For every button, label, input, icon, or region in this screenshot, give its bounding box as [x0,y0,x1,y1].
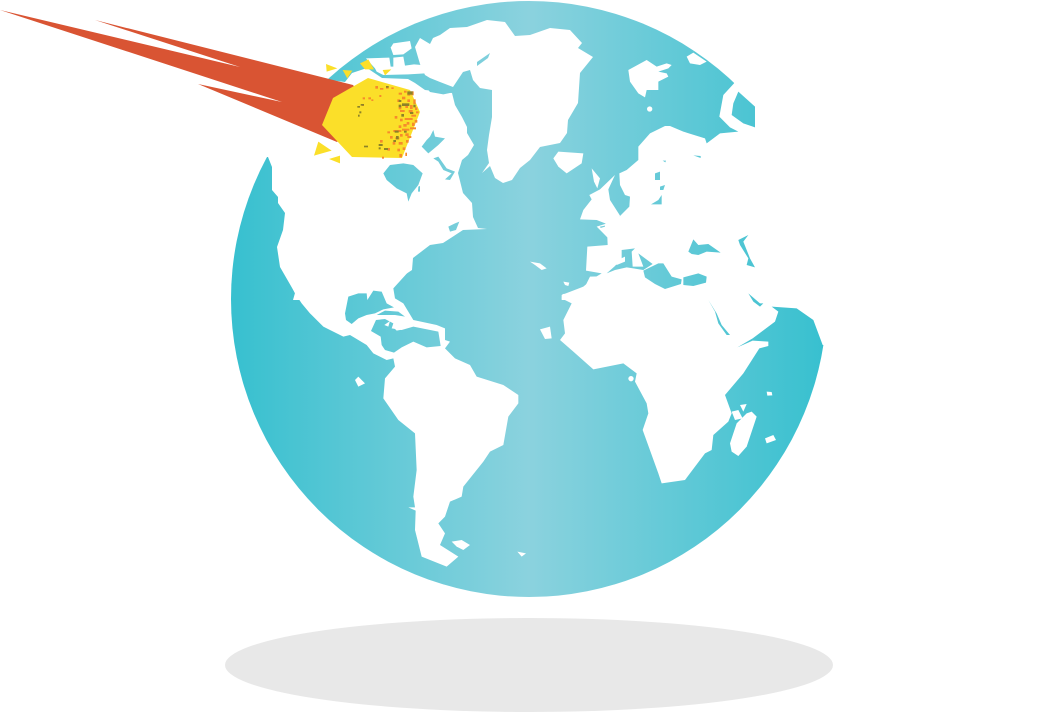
land: Falklands [452,540,470,550]
land: Iceland [553,152,583,173]
land: Jamaica [384,321,390,327]
land: Madagascar [730,412,757,456]
fireball speckles [357,86,419,159]
land: Reunion [765,435,776,443]
land: Arctic Canada [366,41,425,75]
land: Comoros [732,410,743,420]
land: Svalbard [628,60,672,97]
land: North America [267,68,486,300]
land: Cape Verde [540,327,552,339]
land: Franz Josef [687,53,707,65]
comet debris shards [314,59,391,163]
land: Azores [530,262,547,270]
ground shadow [225,618,833,712]
land: Sardinia and Corsica [614,257,625,265]
land: Great Britain and Ireland [580,175,620,227]
land: Madeira [563,282,569,286]
land: Central and South America [283,270,518,567]
globe: continents [267,20,827,567]
globe: ocean [231,1,827,597]
comet tail [0,10,372,142]
land: Africa and Arabia [560,270,837,483]
land: Bear Island [647,106,652,112]
land: Faroe spike [592,168,600,188]
land: Bioko [628,376,634,381]
illustration: comet striking globe [0,1,833,712]
land: Hispaniola [393,324,403,331]
comet fireball [322,78,420,158]
land: Mauritius [767,392,772,396]
land: Galapagos [355,377,365,387]
islands [355,41,776,557]
land: South Georgia [517,552,526,557]
land: Greenland and Ellesmere [415,20,593,183]
land: Seychelles [740,404,747,412]
land: Eurasia [562,83,826,300]
